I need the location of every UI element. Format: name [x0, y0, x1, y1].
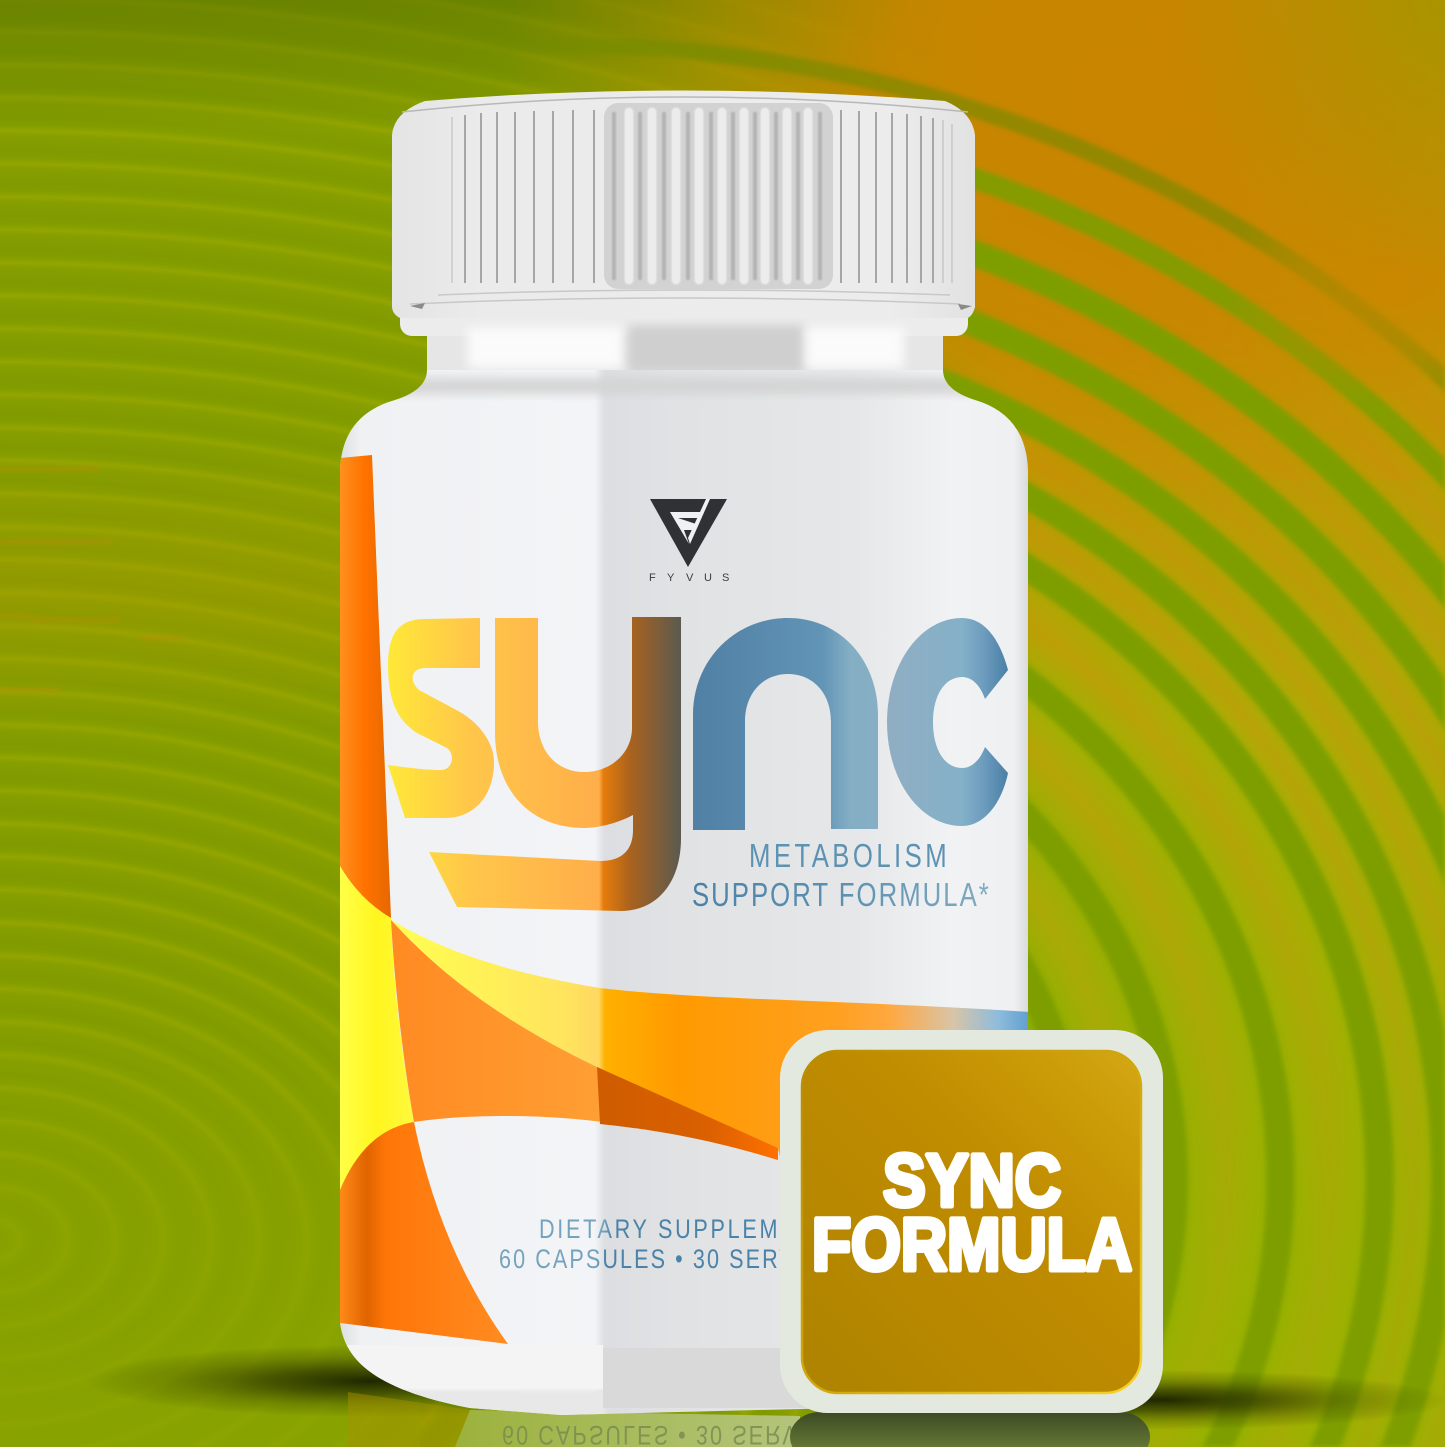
- badge reflection: [790, 1412, 1150, 1447]
- badge text: SYNC: [883, 1139, 1061, 1222]
- label foot text: 60 CAPSULES • 30 SERVINGS: [499, 1245, 857, 1275]
- product tagline: [692, 838, 991, 914]
- bottle body: [340, 370, 1030, 1420]
- logo mark: [650, 499, 727, 567]
- bottle neck: [400, 304, 968, 388]
- reflection under bottle: [348, 1392, 860, 1447]
- product tagline: METABOLISM: [749, 838, 950, 875]
- brand logo: [649, 499, 729, 584]
- product bottle: [340, 90, 1030, 1420]
- badge text: FORMULA: [812, 1203, 1132, 1286]
- product tagline: SUPPORT FORMULA*: [692, 877, 991, 914]
- letter c: [887, 618, 1008, 826]
- label foot text: DIETARY SUPPLEMENT: [539, 1215, 832, 1245]
- bottle cap: [392, 90, 975, 318]
- badge panel: [802, 1051, 1141, 1393]
- letter y: [429, 617, 681, 911]
- letter n: [693, 618, 878, 830]
- ground shadow left: [85, 1345, 655, 1417]
- badge frame: [780, 1030, 1163, 1413]
- label: side stripes and swoosh graphics: [340, 455, 1030, 1344]
- badge text: [812, 1139, 1132, 1286]
- letter s: [388, 618, 494, 818]
- brand name: FYVUS: [649, 572, 729, 584]
- product wordmark: sync: [388, 617, 1008, 911]
- label foot text: [500, 1219, 780, 1268]
- badge: sync formula: [780, 1030, 1163, 1413]
- ground shadow right: [870, 1370, 1445, 1430]
